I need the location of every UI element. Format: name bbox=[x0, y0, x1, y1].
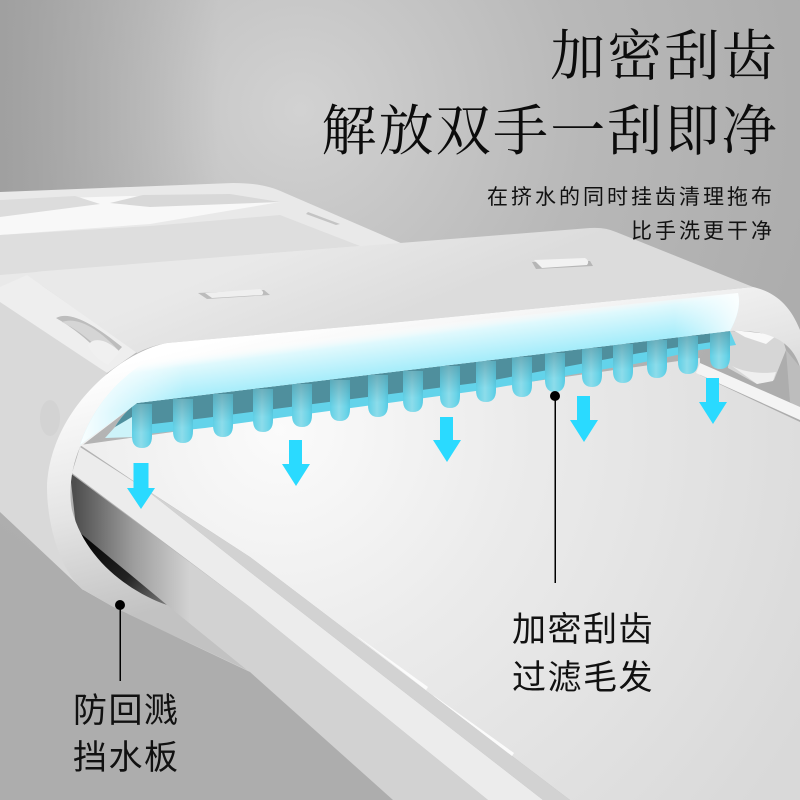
arrow 5 bbox=[699, 378, 727, 424]
leader: comb teeth bbox=[550, 391, 560, 583]
arrow 1 bbox=[127, 463, 155, 509]
scraper comb base bbox=[105, 331, 736, 438]
side rail running to lower right bbox=[70, 473, 488, 800]
label: anti-splash guard bbox=[73, 692, 180, 777]
button right bbox=[532, 258, 593, 269]
tray front edge band bbox=[72, 447, 543, 800]
arrow 2 bbox=[282, 440, 310, 486]
label: anti-splash guard: 挡水板 bbox=[73, 739, 180, 777]
arrow 4 bbox=[570, 396, 598, 442]
tray surface bbox=[80, 358, 800, 800]
subtitle: 在挤水的同时挂齿清理拖布 bbox=[487, 186, 775, 209]
scraper teeth bbox=[132, 332, 730, 448]
splash guard dark wedge bbox=[73, 527, 167, 605]
top surface of head bbox=[27, 228, 753, 353]
subtitle: 比手洗更干净 bbox=[631, 220, 775, 243]
label: anti-splash guard: 防回溅 bbox=[73, 692, 180, 730]
tray edge white highlights bbox=[357, 636, 514, 756]
label: dense comb teeth: 加密刮齿 bbox=[512, 611, 654, 649]
label: dense comb teeth: 过滤毛发 bbox=[512, 659, 654, 697]
leader: splash guard bbox=[115, 600, 125, 681]
flow arrows bbox=[127, 378, 727, 509]
arrow 3 bbox=[433, 417, 461, 462]
subtitle bbox=[487, 186, 775, 243]
back handle body bbox=[0, 183, 410, 290]
left strip with ring marks bbox=[0, 275, 137, 373]
curved white lip bbox=[47, 287, 800, 670]
button left bbox=[198, 289, 270, 299]
label: dense comb teeth bbox=[512, 611, 654, 697]
left body side bbox=[0, 300, 107, 590]
blue glow on lip bbox=[80, 293, 739, 445]
title bbox=[321, 26, 779, 162]
right end roller bbox=[696, 330, 800, 420]
title: 解放双手一刮即净 bbox=[321, 101, 779, 162]
tray edge gray band bbox=[145, 489, 570, 800]
title: 加密刮齿 bbox=[550, 26, 779, 87]
